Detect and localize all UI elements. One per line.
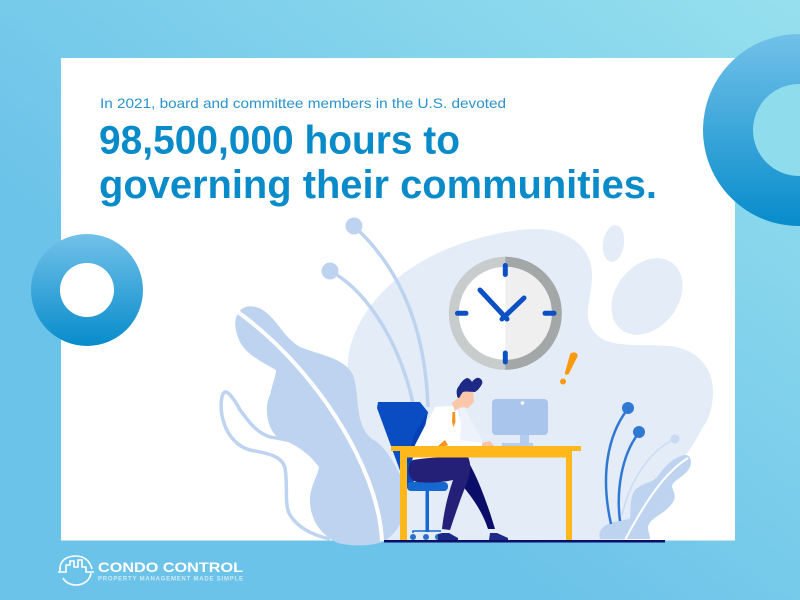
chair xyxy=(377,402,448,540)
stalk heads xyxy=(322,218,362,280)
desk xyxy=(391,446,581,540)
monitor xyxy=(492,399,548,446)
title: governing their communities. xyxy=(99,163,657,207)
back leg xyxy=(462,458,495,529)
leaf midrib xyxy=(238,312,382,541)
outline leaf xyxy=(221,392,330,539)
ring: top right xyxy=(703,34,800,226)
watch xyxy=(438,440,448,446)
left leaf xyxy=(235,306,407,545)
intro text: In 2021, board and committee members in the U.S. devoted xyxy=(100,96,506,111)
shirt xyxy=(412,406,484,462)
logo tagline: PROPERTY MANAGEMENT MADE SIMPLE xyxy=(98,576,243,582)
right stalks xyxy=(606,402,680,524)
background blob xyxy=(348,229,713,541)
person xyxy=(408,378,508,540)
exclamation mark xyxy=(560,352,578,384)
small blobs xyxy=(597,224,697,349)
logo name: CONDO CONTROL xyxy=(98,559,244,575)
logo xyxy=(58,556,244,585)
hair xyxy=(457,378,482,398)
white panel xyxy=(61,58,735,540)
sleeve xyxy=(460,408,484,446)
neck and face xyxy=(452,390,474,411)
tie xyxy=(452,412,456,427)
thigh and front leg xyxy=(408,457,470,530)
right leaf midrib xyxy=(625,458,688,540)
shoes xyxy=(438,533,458,540)
hand xyxy=(482,441,494,446)
tall stalks xyxy=(334,229,428,407)
logo icon xyxy=(58,556,94,585)
title xyxy=(99,118,657,207)
clock xyxy=(449,257,562,370)
ground line xyxy=(384,540,665,542)
ring: left xyxy=(31,234,143,346)
right leaf xyxy=(599,455,691,540)
title: 98,500,000 hours to xyxy=(99,118,460,162)
